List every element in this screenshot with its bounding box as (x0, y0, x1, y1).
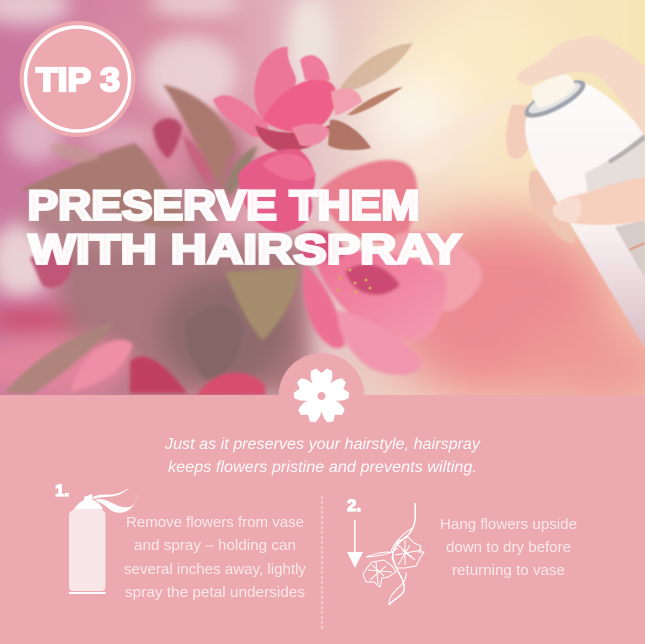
panel: pink lower background (0, 395, 645, 644)
intro text (164, 436, 481, 476)
big blossom (320, 160, 417, 243)
icon: hand and hairspray can (506, 36, 645, 348)
background photo: blossoms and hairspray (0, 0, 645, 420)
step 1 text (124, 515, 307, 601)
icon: down arrow (347, 520, 363, 568)
intro text: Just as it preserves your hairstyle, hairspray (164, 436, 481, 453)
intro text: keeps flowers pristine and prevents wilting. (168, 459, 477, 476)
spray mist (408, 98, 516, 172)
step 1 text: spray the petal undersides (125, 585, 305, 601)
icon: hanging flower line drawing (363, 503, 424, 605)
foliage backdrop (0, 125, 310, 395)
icon: flower in circular tab (278, 353, 364, 439)
middle bud (238, 149, 315, 232)
leaf left (19, 143, 188, 228)
step 2 number: 2. (347, 496, 361, 515)
title: PRESERVE THEM (28, 182, 420, 228)
step 2 text: down to dry before (446, 540, 571, 556)
badge: tip number: TIP 3 (36, 61, 120, 98)
step 1 text: Remove flowers from vase (126, 515, 304, 531)
title (28, 182, 462, 272)
step 1 text: several inches away, lightly (124, 562, 307, 578)
icon: spray can (69, 487, 137, 594)
step 2 text: returning to vase (452, 563, 565, 579)
title: WITH HAIRSPRAY (28, 226, 462, 272)
step 1 text: and spray – holding can (134, 538, 296, 554)
step 2 text (440, 517, 577, 579)
step 2 text: Hang flowers upside (440, 517, 577, 533)
bokeh lights (0, 0, 334, 298)
upper blossom (213, 95, 268, 137)
step 1 number: 1. (55, 481, 69, 500)
badge: tip number (20, 21, 136, 137)
